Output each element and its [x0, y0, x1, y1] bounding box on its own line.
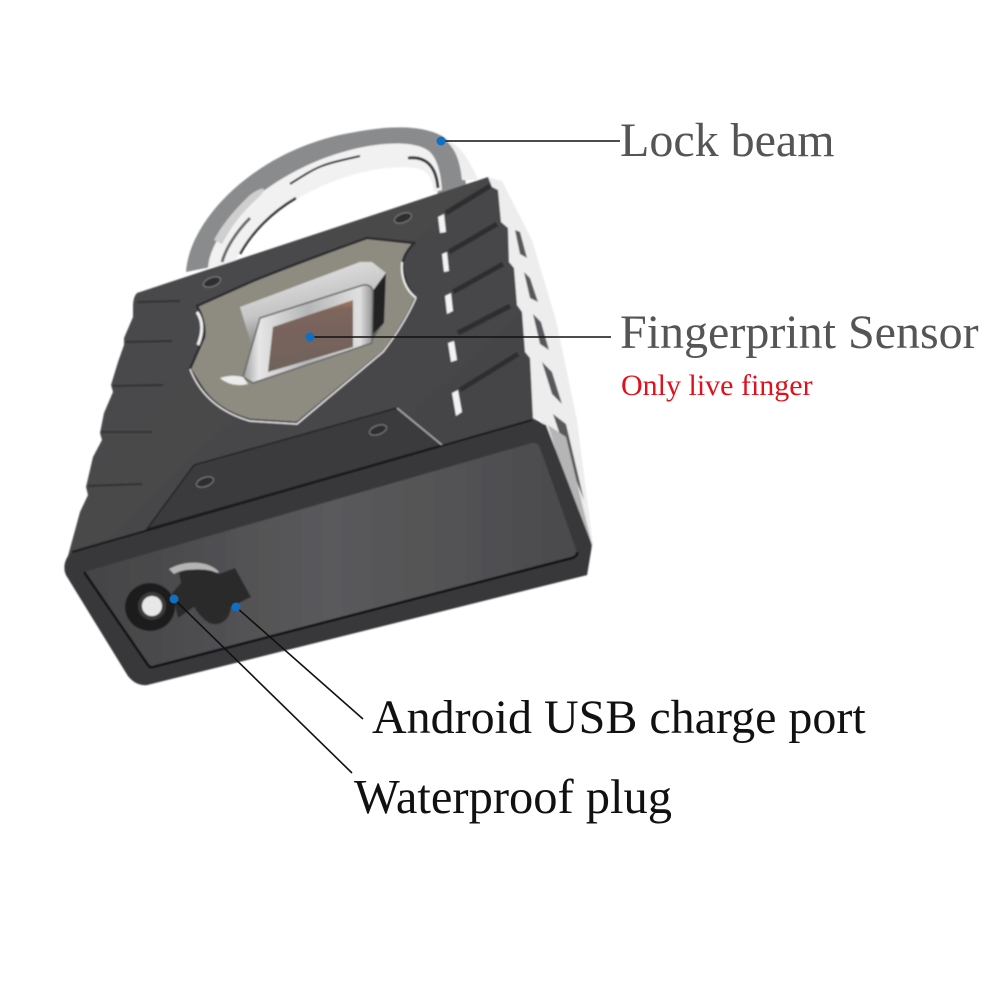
- charge port: [125, 583, 175, 631]
- rim line: [72, 420, 532, 552]
- panel shadow edge: [84, 552, 577, 667]
- label: usb charge port: Android USB charge port: [372, 691, 866, 744]
- plug rim highlight: [169, 563, 219, 575]
- lock body face: [64, 177, 592, 685]
- callout lines: [174, 141, 620, 773]
- icon: padlock: [64, 127, 593, 685]
- label: only live finger: Only live finger: [621, 369, 813, 402]
- shield plate: [190, 238, 416, 424]
- label: waterproof plug: Waterproof plug: [354, 771, 672, 824]
- label: lock beam: Lock beam: [620, 114, 835, 167]
- sensor recess: [240, 262, 386, 380]
- recess dark side: [372, 273, 386, 335]
- face ribs: [438, 186, 518, 416]
- frame bottom glint: [220, 376, 248, 385]
- bottom panel: [84, 443, 577, 667]
- sensor window: [268, 300, 353, 372]
- left side ridges: [88, 301, 180, 486]
- lower recessed section: [147, 408, 442, 529]
- label: fingerprint sensor: Fingerprint Sensor: [620, 306, 979, 359]
- callout dots: [170, 136, 446, 612]
- sensor frame: [243, 285, 373, 383]
- screws: [195, 211, 413, 489]
- waterproof plug: [172, 568, 251, 624]
- recess highlight: [397, 408, 442, 445]
- bottom rim: [64, 420, 592, 685]
- chrome side ribs: [488, 177, 593, 552]
- lock beam: [186, 127, 478, 272]
